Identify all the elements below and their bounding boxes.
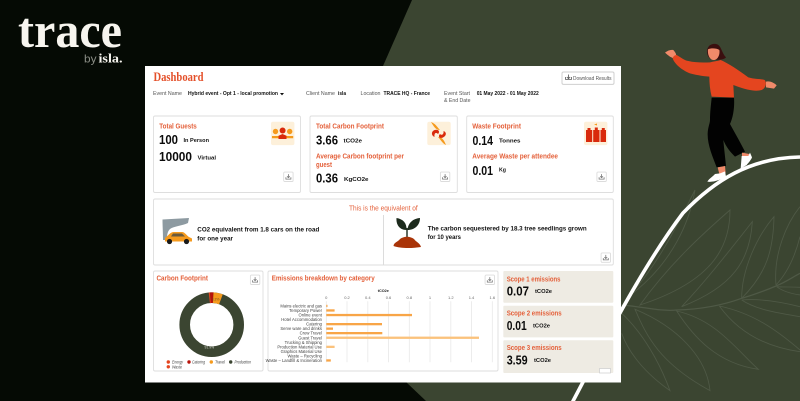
logo: trace by isla: isla. [98,50,122,66]
logo: trace by isla: trace [18,2,122,58]
panel: total carbon footprint: KgCO2e [344,177,368,183]
panel: total guests: 10000 [159,150,192,164]
event details row: isla [338,91,347,97]
panel: carbon footprint donut [154,271,263,371]
legend: Energy [172,360,184,364]
bar chart: Guest Travel [298,335,322,340]
bar chart: 0.8 [407,295,413,300]
panel: waste footprint: 0.01 [472,164,493,178]
panel: waste footprint: Tonnes [499,138,520,144]
panel: waste footprint: Waste Footprint [472,121,521,130]
panel: scope 1 emissions [503,271,613,303]
bar chart: 1.6 [490,295,496,300]
event details row: & End Date [444,98,470,104]
panel: scope 3 emissions: tCO2e [534,358,551,364]
legend: Waste [172,364,183,369]
donut chart [185,298,239,352]
decorative leaf outline [622,190,800,391]
panel: carbon footprint donut: 3.2% [212,298,219,302]
panel: scope 2 emissions [503,306,613,337]
bar chart: Temporary Power [289,308,323,313]
panel: total carbon footprint: Total Carbon Footprint [316,121,384,130]
panel: total carbon footprint: 0.36 [316,172,338,186]
panel: scope 3 emissions: Scope 3 emissions [507,343,562,352]
panel: scope 3 emissions [503,340,613,373]
panel: total carbon footprint: Average Carbon footprint per [316,152,404,160]
panel: scope 1 emissions: Scope 1 emissions [507,274,560,283]
dashboard window [145,66,621,382]
event details row: Hybrid event - Opt 1 - local promotion [188,91,278,97]
download results button [562,72,614,84]
panel: this is the equivalent of: The carbon sequestered by 18.3 tree seedlings grown [428,225,587,232]
panel: total carbon footprint: 3.66 [316,134,338,148]
panel: emissions breakdown by category [266,271,498,371]
bar chart: Waste – Landfill & Incineration [266,358,323,363]
bar chart: Serve ware and drinks [280,326,322,331]
icon: car with exhaust [162,218,192,244]
event details row [153,91,539,104]
panel: total carbon footprint: tCO2e [344,138,362,144]
panel: total guests [154,116,300,192]
panel: scope 3 emissions: 3.59 [507,353,528,367]
bar chart: tCO2e [378,289,389,293]
legend: Production [234,360,252,364]
bar chart: 0.6 [386,295,392,300]
bar chart [266,289,496,363]
panel: carbon footprint donut: 91.9% [204,346,214,350]
panel: scope 2 emissions: Scope 2 emissions [507,309,562,318]
panel: scope 1 emissions: 0.07 [507,285,529,299]
white curved line [572,157,800,401]
bar chart: Online event [298,313,323,318]
panel: carbon footprint donut: Carbon Footprint [156,274,208,283]
bar chart: Waste – Recycling [287,353,323,358]
event details row: 01 May 2022 - 01 May 2022 [477,91,539,97]
panel: scope 1 emissions: tCO2e [535,289,552,295]
panel: this is the equivalent of: This is the equivalent of [349,205,418,212]
legend [167,360,252,369]
bar chart: Trucking & Shipping [285,340,323,345]
bar chart: Catering [306,322,323,327]
event details row: Location [360,91,380,97]
bar chart: 1 [429,295,432,300]
panel: emissions breakdown by category: Emissions breakdown by category [272,274,375,283]
event details row: TRACE HQ - France [384,91,430,97]
panel: scope 2 emissions: 0.01 [507,319,527,333]
dashboard heading: Dashboard [154,69,204,84]
illustration: woman balancing on line [665,44,777,182]
legend: Catering [192,360,206,364]
panel: total guests: Total Guests [159,121,197,130]
panel: this is the equivalent of: for 10 years [428,234,461,241]
panel: total guests: 100 [159,133,178,147]
bar chart: 0.4 [365,295,371,300]
bar chart: 0.2 [344,295,351,300]
bar chart: 1.4 [469,295,475,300]
bar chart: 1.2 [448,295,454,300]
panel: this is the equivalent of [154,199,613,265]
event details row: Client Name [306,91,335,97]
legend: Travel [215,360,226,364]
bar chart: Crew Travel [300,331,322,336]
bar chart: Hotel Accommodation [281,317,323,322]
panel: total carbon footprint [310,116,457,192]
event details row: Event Name [153,91,182,97]
panel: this is the equivalent of: CO2 equivalent from 1.8 cars on the road [197,227,319,234]
panel: scope 2 emissions: tCO2e [533,324,550,330]
panel: waste footprint: Average Waste per attendee [472,152,558,160]
panel: waste footprint: Kg [499,168,506,174]
event details row: Event Start [444,91,470,97]
bar chart: Mains electric and gas [280,304,322,308]
bar chart: Graphics Material Use [281,349,323,354]
logo: trace by isla: by [84,54,97,66]
panel: this is the equivalent of: for one year [197,235,233,242]
panel: total carbon footprint: guest [316,160,332,169]
panel: waste footprint: 0.14 [472,134,493,148]
icon: seedling [394,218,421,248]
bar chart: 0 [325,295,328,300]
panel: total guests: In Person [184,138,209,144]
panel: waste footprint [467,116,613,192]
download results button: Download Results [573,76,612,82]
panel: total guests: Virtual [198,155,217,161]
bar chart: Production Material Use [277,344,323,349]
